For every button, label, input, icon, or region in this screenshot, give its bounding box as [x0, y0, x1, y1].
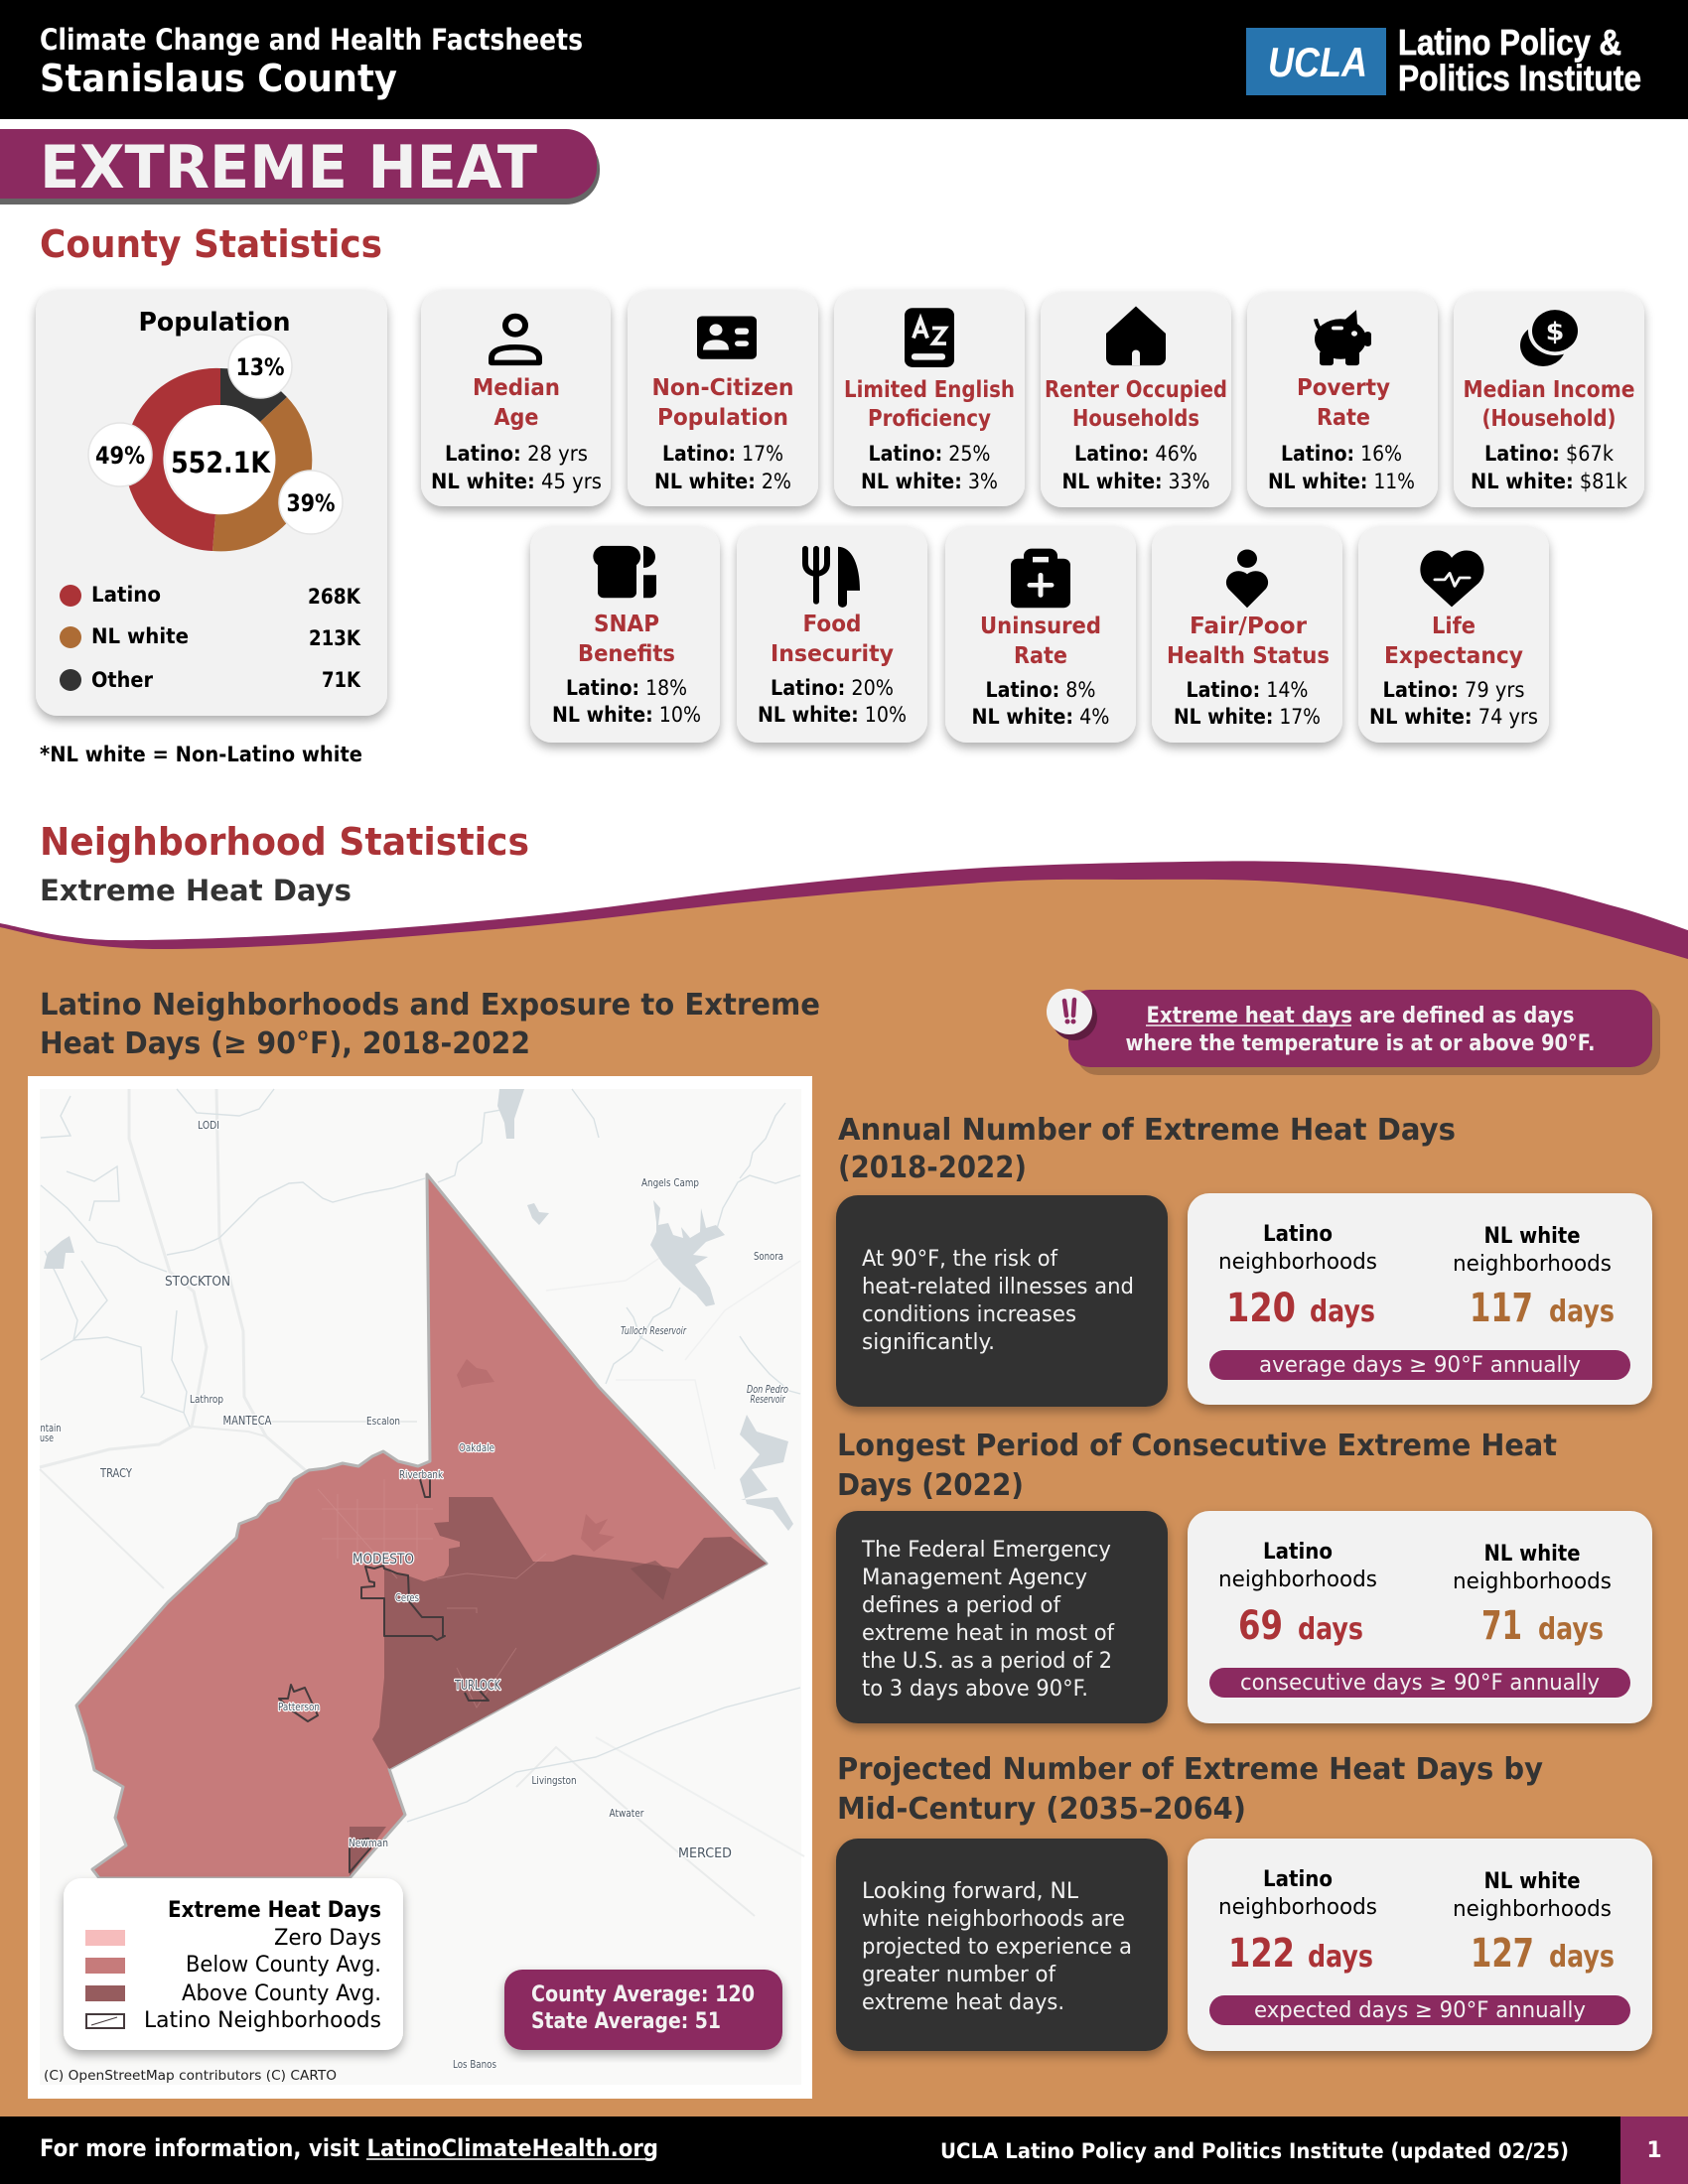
header subtitle: Climate Change and Health Factsheets	[40, 23, 583, 57]
stat card: NL white	[1483, 1869, 1581, 1894]
card: food insecurity: Latino: 20%	[771, 676, 894, 700]
card: snap benefits: Benefits	[578, 641, 675, 667]
section: annual extreme heat days: Annual Number of Extreme Heat Days	[838, 1113, 1456, 1148]
card: limited english proficiency: Latino: 25%	[868, 442, 991, 466]
legend: population groups: 71K	[322, 668, 361, 692]
stat card: NL white	[1483, 1542, 1581, 1567]
card: fair/poor health status: Health Status	[1167, 643, 1330, 669]
card: fair/poor health status: Fair/Poor	[1190, 614, 1308, 639]
map place labels: Escalon	[366, 1415, 400, 1428]
dark note: extreme heat days.	[862, 1990, 1064, 2015]
dark note: heat-related illnesses and	[862, 1275, 1134, 1299]
heading: neighborhood statistics: Neighborhood Statistics	[40, 820, 529, 864]
map place labels: Lathrop	[190, 1393, 223, 1406]
card: uninsured rate: Latino: 8%	[985, 678, 1096, 702]
map legend	[64, 1878, 403, 2050]
dark note: defines a period of	[862, 1593, 1061, 1618]
dark note: The Federal Emergency	[861, 1538, 1111, 1563]
stat card	[1188, 1193, 1652, 1405]
map place labels: MODESTO	[352, 1552, 414, 1568]
card: median income: NL white: $81k	[1471, 470, 1628, 493]
card: poverty rate: Rate	[1317, 405, 1370, 431]
stat card: consecutive days ≥ 90°F annually	[1240, 1671, 1600, 1696]
card: snap benefits: SNAP	[594, 612, 659, 637]
map place labels	[40, 1119, 788, 2071]
stat card: neighborhoods	[1218, 1895, 1377, 1920]
stat card: expected days ≥ 90°F annually	[1254, 1998, 1586, 2023]
county map shapes	[76, 1174, 767, 1878]
map place labels: Sonora	[754, 1250, 783, 1263]
map place labels: Newman	[349, 1837, 388, 1849]
section: consecutive extreme heat days: Longest Period of Consecutive Extreme Heat	[837, 1429, 1557, 1463]
stat card: 71	[1481, 1603, 1522, 1649]
donut chart: 552.1K	[171, 446, 271, 479]
stat card: NL white	[1483, 1224, 1581, 1249]
card: life expectancy: Expectancy	[1384, 643, 1523, 669]
dark note: projected to experience a	[862, 1935, 1132, 1960]
card: snap benefits: Latino: 18%	[566, 676, 687, 700]
map legend: Below County Avg.	[186, 1953, 381, 1978]
donut chart	[88, 335, 343, 551]
map place labels: TRACY	[99, 1466, 133, 1480]
section: projected extreme heat days	[836, 1752, 1652, 2051]
callout: definition	[1047, 989, 1660, 1075]
stat card: neighborhoods	[1453, 1570, 1612, 1594]
card: food insecurity: NL white: 10%	[758, 703, 907, 727]
card: non-citizen population: Non-Citizen	[651, 375, 794, 401]
map place labels: Don Pedro	[747, 1383, 788, 1396]
card: renter occupied households: Renter Occupied	[1045, 377, 1227, 403]
dark note: At 90°F, the risk of	[862, 1247, 1058, 1272]
card: median income: (Household)	[1481, 406, 1617, 432]
population heading: Population	[139, 308, 290, 338]
section: consecutive extreme heat days: Days (2022)	[837, 1468, 1024, 1503]
dark note: greater number of	[862, 1963, 1056, 1987]
legend: population groups: 268K	[308, 585, 361, 609]
stat card: 69	[1238, 1603, 1283, 1649]
section: annual extreme heat days: (2018-2022)	[838, 1151, 1027, 1185]
stat card	[1188, 1839, 1652, 2051]
card: food insecurity	[737, 526, 927, 743]
stat card: average days ≥ 90°F annually	[1259, 1353, 1581, 1378]
card: median income	[1454, 292, 1644, 507]
icon: bread	[593, 546, 656, 598]
dark note: extreme heat in most of	[862, 1621, 1115, 1646]
heading: county statistics: County Statistics	[40, 222, 382, 266]
dark note	[836, 1511, 1168, 1723]
card: fair/poor health status: NL white: 17%	[1174, 705, 1321, 729]
icon: id card	[697, 317, 757, 359]
dark note: to 3 days above 90°F.	[862, 1677, 1088, 1702]
map place labels: Los Banos	[453, 2058, 496, 2071]
card: uninsured rate: NL white: 4%	[971, 705, 1110, 729]
icon: piggy bank	[1315, 310, 1371, 365]
heading: map	[40, 988, 820, 1061]
icon: coins: $	[1546, 318, 1564, 346]
county and state averages	[504, 1970, 782, 2050]
stat card: neighborhoods	[1453, 1897, 1612, 1922]
footer bar: 1	[1646, 2138, 1662, 2163]
stat card: neighborhoods	[1218, 1250, 1377, 1275]
map place labels: Reservoir	[751, 1393, 785, 1406]
UCLA logo: Politics Institute	[1398, 58, 1641, 98]
stat card: 117	[1470, 1286, 1533, 1331]
donut chart: 13%	[236, 353, 284, 381]
section: consecutive extreme heat days	[836, 1429, 1652, 1723]
stat card: days	[1310, 1295, 1375, 1329]
card: median age: Median	[473, 375, 560, 401]
UCLA logo: UCLA	[1268, 39, 1367, 85]
legend: population groups: Latino	[91, 583, 161, 607]
footnote: *NL white = Non-Latino white	[40, 743, 362, 766]
stat card: days	[1549, 1295, 1615, 1329]
card: median age	[421, 290, 611, 506]
map place labels: Atwater	[610, 1807, 644, 1820]
card: limited english proficiency: Limited English	[844, 377, 1015, 403]
card: life expectancy: Latino: 79 yrs	[1382, 678, 1525, 702]
legend: population groups: NL white	[91, 624, 189, 648]
stat card: 127	[1471, 1931, 1534, 1977]
callout: definition: Extreme heat days are defined as days	[1146, 1004, 1575, 1028]
map place labels: Oakdale	[459, 1441, 494, 1454]
panel: population	[36, 290, 387, 716]
stat card: days	[1298, 1612, 1363, 1647]
map place labels: use	[40, 1432, 54, 1444]
card: median age: Age	[494, 405, 538, 431]
card: limited english proficiency: Proficiency	[868, 406, 991, 432]
icon: fork and knife	[805, 547, 860, 608]
subheading: extreme heat days: Extreme Heat Days	[40, 874, 352, 907]
card: snap benefits	[530, 526, 720, 743]
card: median age: Latino: 28 yrs	[445, 442, 588, 466]
dark note: conditions increases	[862, 1302, 1076, 1327]
map credit: (C) OpenStreetMap contributors (C) CARTO	[44, 2069, 337, 2084]
dark note: Looking forward, NL	[862, 1879, 1079, 1904]
card: fair/poor health status: Latino: 14%	[1186, 678, 1309, 702]
wave background	[0, 861, 1688, 2184]
icon: exclamation bubble	[1047, 989, 1097, 1040]
card: median income: Median Income	[1464, 377, 1634, 403]
map place labels: STOCKTON	[165, 1275, 230, 1290]
card: life expectancy	[1358, 526, 1549, 743]
dark note	[836, 1195, 1168, 1407]
map place labels: Tulloch Reservoir	[621, 1324, 687, 1337]
card: poverty rate	[1247, 292, 1438, 507]
heading: map: Heat Days (≥ 90°F), 2018-2022	[40, 1026, 530, 1061]
icon: coins	[1520, 306, 1582, 366]
card: renter occupied households	[1041, 292, 1231, 507]
legend: population groups: 213K	[309, 626, 361, 650]
heading: map: Latino Neighborhoods and Exposure to Extreme	[40, 988, 820, 1023]
card: snap benefits: NL white: 10%	[552, 703, 701, 727]
map place labels: ntain	[40, 1422, 62, 1434]
card: limited english proficiency: NL white: 3%	[861, 470, 998, 493]
title banner: extreme heat: EXTREME HEAT	[40, 133, 537, 203]
dark note	[836, 1839, 1168, 2051]
card: poverty rate: NL white: 11%	[1268, 470, 1415, 493]
stat card: Latino	[1263, 1222, 1333, 1247]
icon: first aid kit	[1011, 549, 1070, 608]
dark note: significantly.	[862, 1330, 995, 1355]
card: life expectancy: NL white: 74 yrs	[1369, 705, 1538, 729]
section: projected extreme heat days: Mid-Century (2035–2064)	[837, 1792, 1246, 1827]
UCLA logo	[1246, 22, 1641, 98]
stat card: neighborhoods	[1453, 1252, 1612, 1277]
footer bar: UCLA Latino Policy and Politics Institute (updated 02/25)	[940, 2139, 1569, 2163]
stat card: 120	[1226, 1286, 1296, 1331]
map legend: Latino Neighborhoods	[144, 2008, 381, 2033]
section: annual extreme heat days	[836, 1113, 1652, 1407]
stat card: Latino	[1263, 1867, 1333, 1892]
map place labels: Ceres	[395, 1591, 419, 1604]
donut chart: 39%	[286, 489, 336, 517]
footer bar: For more information, visit LatinoClimateHealth.org	[40, 2134, 658, 2162]
stat card: 122	[1228, 1931, 1295, 1977]
map legend: Extreme Heat Days	[168, 1898, 381, 1923]
donut chart: 49%	[95, 442, 145, 470]
card: non-citizen population	[628, 290, 818, 506]
map place labels: MERCED	[678, 1846, 732, 1861]
county and state averages: County Average: 120	[531, 1982, 755, 2007]
stat card: neighborhoods	[1218, 1568, 1377, 1592]
card: non-citizen population: Latino: 17%	[662, 442, 783, 466]
callout: definition: where the temperature is at or above 90°F.	[1126, 1031, 1595, 1056]
stat card: days	[1549, 1940, 1615, 1975]
latino neighborhoods outlines	[279, 1479, 489, 1872]
card: renter occupied households: Households	[1072, 406, 1199, 432]
map place labels: MANTECA	[222, 1414, 272, 1428]
map place labels: Angels Camp	[641, 1176, 699, 1189]
dark note: Management Agency	[862, 1566, 1087, 1590]
legend: population groups	[60, 583, 361, 692]
card: renter occupied households: Latino: 46%	[1074, 442, 1197, 466]
card: fair/poor health status	[1152, 526, 1342, 743]
icon: heart with pulse	[1420, 550, 1484, 607]
card: non-citizen population: Population	[657, 405, 788, 431]
card: limited english proficiency	[834, 290, 1025, 506]
icon: house	[1106, 306, 1166, 365]
stat card: Latino	[1263, 1540, 1333, 1565]
card: uninsured rate: Uninsured	[980, 614, 1101, 639]
dark note: the U.S. as a period of 2	[862, 1649, 1112, 1674]
stat card: days	[1538, 1612, 1604, 1647]
map place labels: Patterson	[278, 1701, 320, 1713]
card: renter occupied households: NL white: 33%	[1062, 470, 1209, 493]
card: food insecurity: Insecurity	[771, 641, 894, 667]
card: food insecurity: Food	[802, 612, 862, 637]
header bar	[0, 0, 1688, 119]
county name: Stanislaus County	[40, 57, 397, 100]
map place labels: TURLOCK	[454, 1679, 500, 1694]
card: non-citizen population: NL white: 2%	[654, 470, 791, 493]
UCLA logo: Latino Policy &	[1398, 22, 1621, 63]
card: median income: Latino: $67k	[1484, 442, 1615, 466]
map panel	[28, 1076, 812, 2099]
map place labels: Livingston	[532, 1774, 577, 1787]
dark note: white neighborhoods are	[862, 1907, 1125, 1932]
map place labels: Riverbank	[399, 1468, 443, 1481]
map place labels: LODI	[198, 1119, 219, 1132]
icon: dictionary book	[905, 308, 954, 367]
map legend: Above County Avg.	[182, 1981, 381, 2006]
stat card	[1188, 1511, 1652, 1723]
card: life expectancy: Life	[1432, 614, 1476, 639]
card: uninsured rate: Rate	[1014, 643, 1067, 669]
county and state averages: State Average: 51	[531, 2009, 721, 2034]
stat card: days	[1308, 1940, 1373, 1975]
legend: population groups: Other	[91, 668, 154, 692]
section: projected extreme heat days: Projected Number of Extreme Heat Days by	[837, 1752, 1543, 1787]
map legend: Zero Days	[274, 1926, 381, 1951]
card: poverty rate: Poverty	[1297, 375, 1390, 401]
icon: person	[492, 317, 539, 362]
footer bar	[0, 2116, 1688, 2184]
icon: person with heart	[1226, 550, 1268, 608]
card: median age: NL white: 45 yrs	[431, 470, 602, 493]
card: uninsured rate	[945, 526, 1136, 743]
card: poverty rate: Latino: 16%	[1281, 442, 1402, 466]
